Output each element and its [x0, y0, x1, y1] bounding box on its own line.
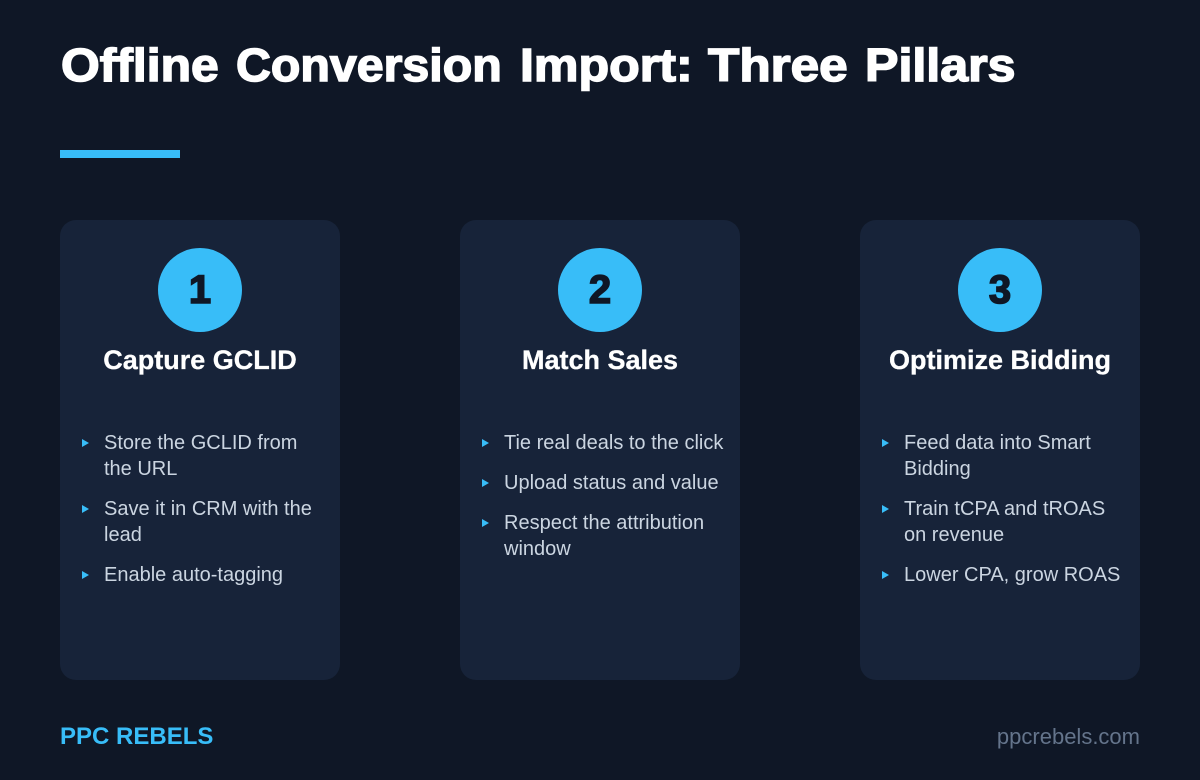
title: Offline [61, 39, 219, 91]
bullet text: Save it in CRM with the lead [104, 498, 312, 546]
panel: capture gclid [60, 220, 340, 680]
bullet icon [882, 439, 889, 447]
number badge 3 [958, 248, 1042, 332]
bullet text: Enable auto-tagging [104, 564, 283, 586]
bullet icon [482, 439, 489, 447]
bullet text: Feed data into Smart Bidding [904, 432, 1091, 480]
bullet text: Upload status and value [504, 472, 719, 494]
bullet icon [882, 571, 889, 579]
title [61, 39, 1016, 92]
number badge 1: 1 [189, 268, 211, 312]
panel: optimize bidding [860, 220, 1140, 680]
bullet text: Store the GCLID from the URL [104, 432, 297, 480]
number badge 1 [158, 248, 242, 332]
bullet text: Lower CPA, grow ROAS [904, 564, 1120, 586]
title: Pillars [865, 39, 1016, 91]
heading: match sales: Match Sales [522, 345, 678, 375]
bullet icon [482, 519, 489, 527]
heading: capture gclid: Capture GCLID [103, 345, 297, 375]
title: Conversion [236, 39, 502, 91]
title: Three [708, 39, 848, 91]
number badge 2: 2 [589, 268, 611, 312]
bullet text: Tie real deals to the click [504, 432, 723, 454]
bullet text: Train tCPA and tROAS on revenue [904, 498, 1105, 546]
bullet icon [882, 505, 889, 513]
bullet icon [82, 571, 89, 579]
accent bar [60, 150, 180, 158]
panel: match sales [460, 220, 740, 680]
bullet icon [82, 505, 89, 513]
title: Import: [520, 39, 693, 91]
number badge 3: 3 [989, 268, 1011, 312]
website: ppcrebels.com [997, 724, 1140, 749]
bullet text: Respect the attribution window [504, 512, 704, 560]
brand name: PPC REBELS [60, 723, 213, 750]
number badge 2 [558, 248, 642, 332]
heading: optimize bidding: Optimize Bidding [889, 345, 1111, 375]
bullet icon [82, 439, 89, 447]
bullet icon [482, 479, 489, 487]
